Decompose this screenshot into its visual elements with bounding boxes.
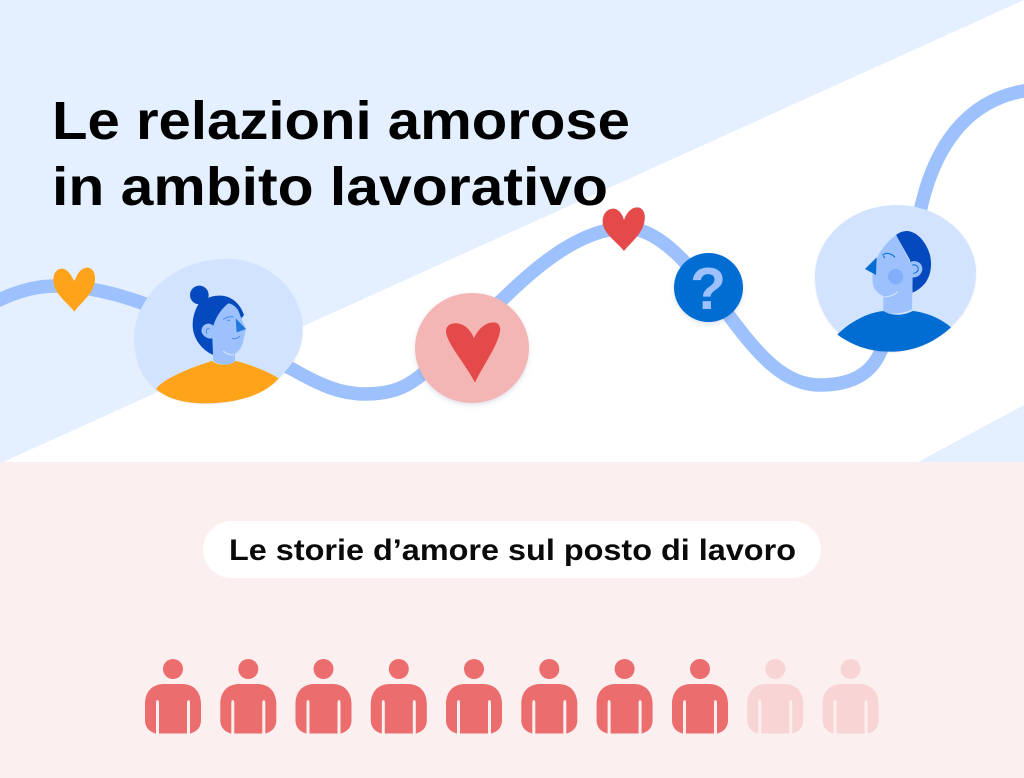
person 1 — [145, 659, 201, 734]
subtitle pill — [203, 521, 821, 578]
person 8 — [672, 659, 728, 734]
person 9 faded — [747, 659, 803, 734]
hair — [896, 231, 931, 293]
icon: question badge: ? — [690, 256, 726, 322]
panel: top background — [0, 0, 1024, 462]
icon: question badge — [674, 253, 743, 322]
person 2 — [220, 659, 276, 734]
person 5 — [446, 659, 502, 734]
nose — [865, 257, 877, 275]
subtitle pill: Le storie d’amore sul posto di lavoro — [229, 534, 796, 567]
title: in ambito lavorativo — [52, 157, 608, 217]
icon: heart badge — [415, 293, 529, 403]
person 3 — [296, 659, 352, 734]
facial details — [882, 253, 918, 273]
panel: bottom background — [0, 462, 1024, 778]
person 6 — [521, 659, 577, 734]
neck highlight — [223, 351, 234, 355]
title — [52, 91, 630, 217]
icon: woman avatar — [135, 259, 303, 403]
nose — [236, 318, 246, 332]
avatar background — [135, 259, 303, 403]
cheek — [888, 269, 903, 284]
man head — [865, 231, 931, 314]
person 10 faded — [823, 659, 879, 734]
person 7 — [597, 659, 653, 734]
blue shirt — [837, 311, 951, 352]
icon: red heart — [603, 207, 645, 251]
pictogram chart: 8 of 10 people — [145, 659, 879, 734]
icon: orange heart — [53, 268, 95, 312]
face and neck — [872, 235, 922, 314]
facial details — [206, 317, 240, 339]
hair — [190, 286, 244, 355]
icon: man avatar — [815, 205, 976, 352]
smile — [883, 292, 898, 297]
person 4 — [371, 659, 427, 734]
face and neck — [202, 303, 246, 365]
title: Le relazioni amorose — [52, 91, 630, 151]
orange shirt — [156, 361, 279, 403]
woman head — [190, 286, 246, 365]
avatar background — [815, 205, 976, 352]
journey path — [0, 90, 1024, 394]
